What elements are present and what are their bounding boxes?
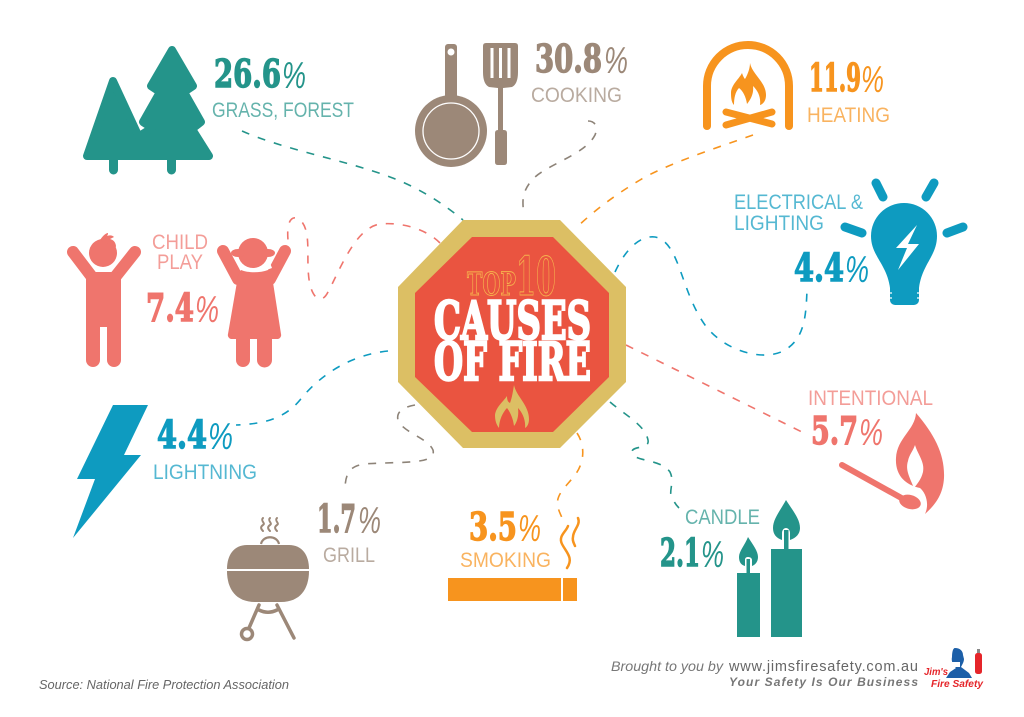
value: 4.4%: 4.4	[157, 412, 207, 457]
dashed connector: grill	[345, 405, 433, 490]
value: 3.5%: %	[518, 508, 541, 549]
item: candle	[660, 500, 802, 637]
value: 4.4%: %	[845, 249, 869, 290]
footer credit	[611, 659, 918, 689]
value: 5.7%: %	[859, 412, 883, 453]
label: candle: CANDLE	[685, 506, 760, 529]
source note: Source: National Fire Protection Association	[39, 677, 289, 692]
value: 30.8%: %	[604, 40, 628, 81]
heading: top 10: TOP	[467, 265, 516, 303]
label: lightning: LIGHTNING	[153, 461, 257, 484]
footer credit: Your Safety Is Our Business	[729, 675, 918, 689]
value: 2.1%: 2.1	[660, 530, 700, 575]
label: electrical and lighting	[734, 191, 863, 235]
icon: boy	[73, 233, 135, 367]
heading: top 10: 10	[516, 246, 556, 308]
label: grass, forest: GRASS, FOREST	[212, 99, 354, 122]
icon: candles	[737, 500, 802, 637]
value: 3.5%: 3.5	[469, 504, 517, 549]
item: grass, forest	[87, 50, 354, 174]
badge: gold octagon	[398, 220, 626, 448]
label: child play: CHILD	[152, 231, 208, 254]
logo: Jim's Fire Safety: Fire Safety	[931, 678, 984, 690]
item: cooking	[415, 36, 628, 167]
value: 30.8%: 30.8	[535, 36, 602, 81]
dashed connector: candle	[610, 402, 679, 508]
heading: causes of fire	[434, 291, 591, 393]
footer credit: Brought to you by	[611, 659, 724, 674]
icon: cigarette	[448, 518, 579, 601]
label: electrical and lighting: LIGHTING	[734, 212, 824, 235]
value: 4.4%: 4.4	[794, 245, 844, 290]
icon: girl	[223, 238, 285, 368]
heading: causes of fire: CAUSES	[434, 291, 591, 352]
item: child play	[73, 231, 285, 368]
item: heating	[707, 45, 890, 127]
value: 1.7%: %	[358, 500, 381, 541]
dashed connector: electrical	[615, 237, 807, 355]
dashed connector: child play	[288, 218, 440, 299]
value: 26.6%: %	[282, 55, 306, 96]
heading: top 10	[467, 246, 556, 308]
value: 11.9%: %	[861, 59, 884, 100]
value: 7.4%: 7.4	[146, 285, 194, 330]
central stop sign badge	[398, 220, 626, 448]
label: cooking: COOKING	[531, 84, 622, 107]
label: smoking: SMOKING	[460, 549, 551, 572]
item: intentional	[808, 387, 944, 514]
dashed connector: cooking	[523, 121, 596, 215]
icon: kettle grill	[227, 518, 309, 640]
heading: causes of fire: OF FIRE	[434, 332, 591, 393]
dashed connector: smoking	[557, 433, 583, 518]
label: child play: PLAY	[157, 251, 203, 274]
logo: Jim's Fire Safety: Jim's	[924, 666, 948, 678]
icon: spatula	[483, 43, 518, 165]
item: grill	[227, 496, 381, 640]
label: heating: HEATING	[807, 104, 890, 127]
value: 1.7%: 1.7	[317, 496, 356, 541]
icon: frying pan	[415, 44, 487, 167]
dashed connector: lightning	[236, 351, 388, 425]
label: child play	[152, 231, 208, 274]
icon: lightning bolt	[73, 405, 148, 538]
value: 11.9%: 11.9	[809, 55, 861, 100]
dashed connector: heating	[577, 135, 753, 227]
item: lightning	[73, 405, 257, 538]
badge: red octagon	[415, 237, 609, 432]
icon: pine trees	[87, 50, 209, 174]
label: grill: GRILL	[323, 544, 375, 567]
value: 7.4%: %	[195, 289, 219, 330]
value: 26.6%: 26.6	[214, 51, 281, 96]
dashed connector: grass, forest	[242, 131, 463, 220]
item: smoking	[448, 504, 579, 601]
value: 5.7%: 5.7	[811, 408, 858, 453]
label: intentional: INTENTIONAL	[808, 387, 933, 410]
label: electrical and lighting: ELECTRICAL &	[734, 191, 863, 214]
dashed connector: intentional	[626, 345, 808, 435]
icon: fireplace	[707, 45, 789, 126]
item: electrical and lighting	[734, 183, 963, 305]
logo: Jim's Fire Safety	[924, 648, 984, 690]
value: 2.1%: %	[701, 534, 724, 575]
icon: light bulb	[845, 183, 963, 305]
icon: burning match	[842, 413, 944, 514]
icon: badge flame	[495, 385, 529, 428]
value: 4.4%: %	[208, 416, 233, 457]
footer credit: www.jimsfiresafety.com.au	[728, 659, 918, 675]
